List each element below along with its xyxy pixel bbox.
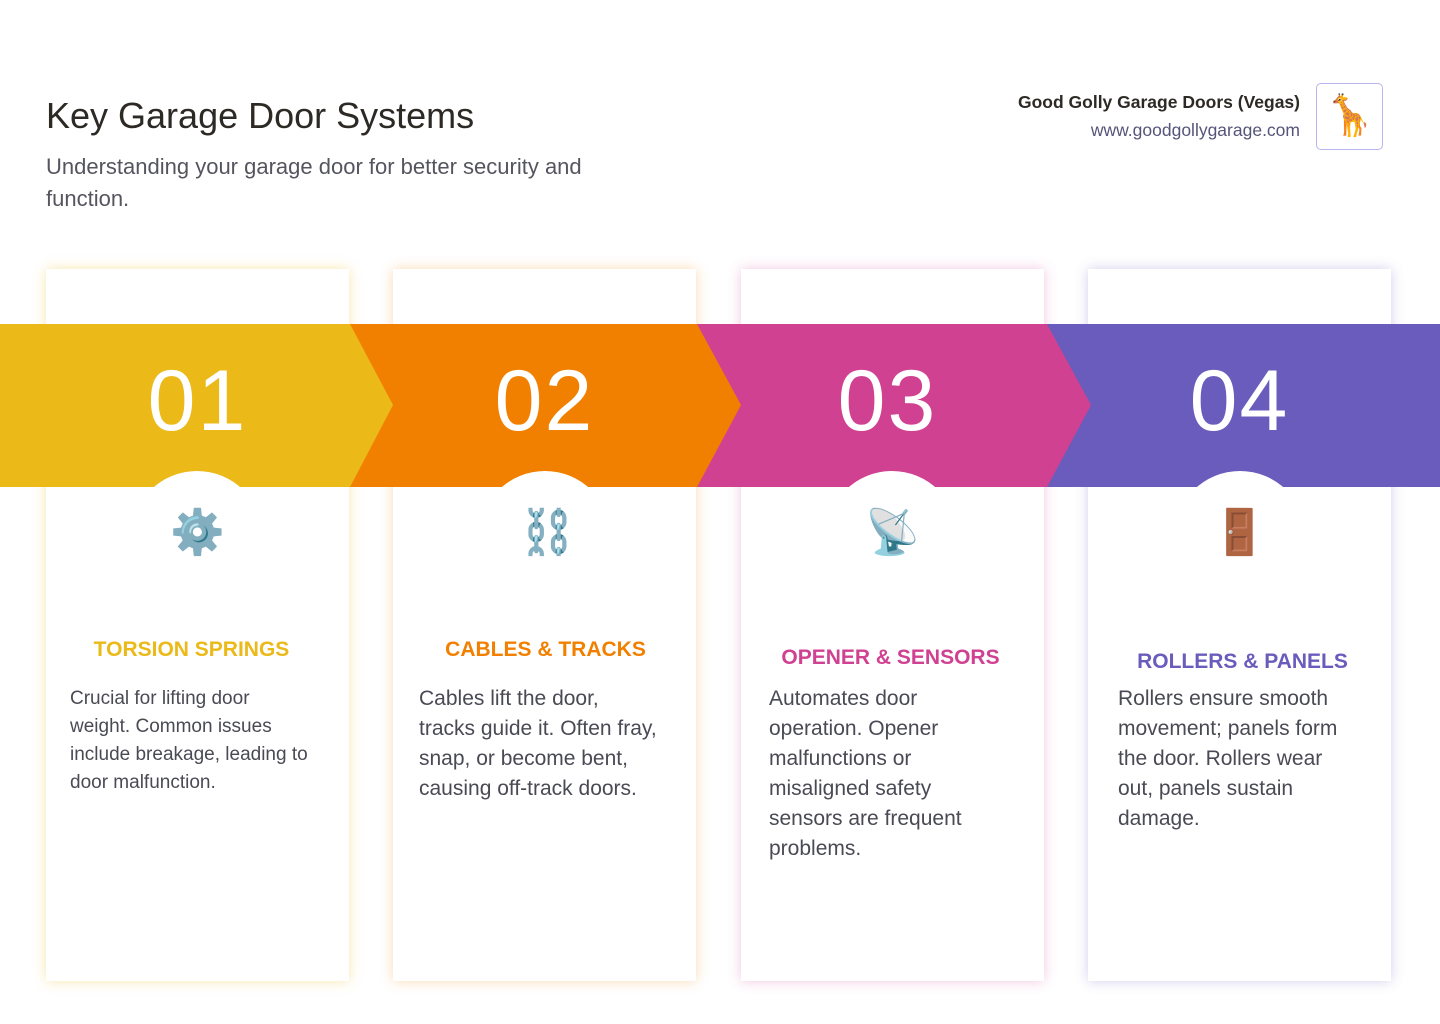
text: rollers: the door. Rollers wear bbox=[1118, 747, 1322, 770]
text: opener: operation. Opener bbox=[769, 717, 938, 740]
text: cables: causing off-track doors. bbox=[419, 777, 637, 800]
number 01: 01 bbox=[148, 353, 247, 449]
number 02: 02 bbox=[495, 353, 594, 449]
icon: gear: ⚙️ bbox=[170, 508, 225, 557]
text: opener: problems. bbox=[769, 837, 861, 860]
subtitle: Understanding your garage door for better security and function. bbox=[46, 154, 582, 211]
card 4 bbox=[1088, 269, 1391, 981]
text: cables: tracks guide it. Often fray, bbox=[419, 717, 657, 740]
text: rollers: Rollers ensure smooth bbox=[1118, 687, 1328, 710]
title: rollers & panels: ROLLERS & PANELS bbox=[1137, 650, 1348, 673]
title: cables & tracks: CABLES & TRACKS bbox=[445, 638, 646, 661]
number 03: 03 bbox=[838, 353, 937, 449]
text: opener bbox=[769, 687, 962, 860]
text: rollers: damage. bbox=[1118, 807, 1200, 830]
brand block bbox=[1018, 92, 1300, 140]
title: opener & sensors: OPENER & SENSORS bbox=[781, 646, 1000, 669]
text: torsion springs: door malfunction. bbox=[70, 772, 216, 793]
text: rollers: movement; panels form bbox=[1118, 717, 1337, 740]
text: rollers bbox=[1118, 687, 1337, 830]
brand block: www.goodgollygarage.com bbox=[1091, 120, 1300, 140]
title: torsion springs: TORSION SPRINGS bbox=[94, 638, 289, 661]
icon: chain: ⛓️ bbox=[520, 508, 575, 557]
logo bbox=[1316, 83, 1383, 150]
text: opener: sensors are frequent bbox=[769, 807, 962, 830]
text: cables: snap, or become bent, bbox=[419, 747, 628, 770]
text: torsion springs: include breakage, leading to bbox=[70, 744, 308, 765]
text: torsion springs: Crucial for lifting door bbox=[70, 688, 250, 709]
number 04: 04 bbox=[1190, 353, 1289, 449]
brand block: Good Golly Garage Doors (Vegas) bbox=[1018, 92, 1300, 112]
card 1 bbox=[46, 269, 349, 981]
text: opener: Automates door bbox=[769, 687, 917, 710]
text: cables bbox=[419, 687, 657, 800]
title: Key Garage Door Systems bbox=[46, 95, 474, 136]
icon: satellite: 📡 bbox=[865, 508, 920, 557]
text: rollers: out, panels sustain bbox=[1118, 777, 1293, 800]
card 2 bbox=[393, 269, 696, 981]
text: opener: misaligned safety bbox=[769, 777, 931, 800]
card 3 bbox=[741, 269, 1044, 981]
text: torsion springs: weight. Common issues bbox=[70, 716, 272, 737]
text: opener: malfunctions or bbox=[769, 747, 911, 770]
text: cables: Cables lift the door, bbox=[419, 687, 599, 710]
text: torsion springs bbox=[70, 688, 308, 793]
icon: door: 🚪 bbox=[1212, 508, 1267, 557]
logo: 🦒 bbox=[1325, 94, 1374, 138]
